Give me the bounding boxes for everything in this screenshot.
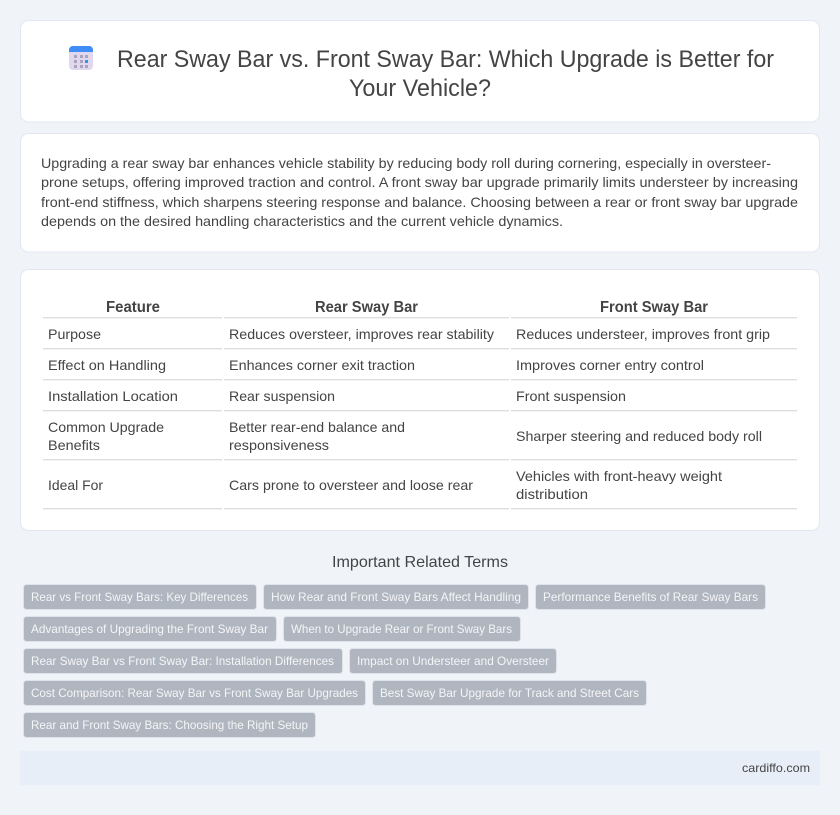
row: ideal for: Vehicles with front-heavy weight <box>516 468 722 484</box>
title: Rear Sway Bar vs. Front Sway Bar: Which Upgrade is Better for <box>117 46 774 73</box>
tag: How Rear and Front Sway Bars Affect Handling <box>271 590 521 604</box>
panel: comparison table <box>20 270 820 530</box>
tag <box>350 648 556 674</box>
tag: Performance Benefits of Rear Sway Bars <box>543 590 758 604</box>
row: effect on handling <box>48 357 704 373</box>
row: common upgrade benefits: responsiveness <box>229 437 329 453</box>
row: purpose: Reduces understeer, improves front grip <box>516 326 770 342</box>
table header row <box>106 299 708 316</box>
tag: Rear and Front Sway Bars: Choosing the Right Setup <box>31 718 308 732</box>
footer: cardiffo.com <box>742 761 810 775</box>
row: common upgrade benefits: Better rear-end balance and <box>229 419 405 435</box>
row: installation location: Installation Location <box>48 388 178 404</box>
icon: calendar <box>69 46 93 70</box>
row: purpose: Purpose <box>48 326 101 342</box>
tag: Advantages of Upgrading the Front Sway Bar <box>31 622 268 636</box>
panel: header <box>20 20 820 122</box>
row: ideal for: Ideal For <box>48 477 103 493</box>
title: Your Vehicle? <box>349 75 491 102</box>
tag <box>284 616 520 642</box>
row: ideal for: Cars prone to oversteer and loose rear <box>229 477 473 493</box>
footer <box>20 751 820 785</box>
tag: Cost Comparison: Rear Sway Bar vs Front Sway Bar Upgrades <box>31 686 358 700</box>
tag <box>264 584 528 610</box>
row: common upgrade benefits: Common Upgrade <box>48 419 164 435</box>
intro text: Upgrading a rear sway bar enhances vehicle stability by reducing body roll during cornering, especially in oversteer- <box>41 155 771 171</box>
tag <box>372 680 646 706</box>
tag: Impact on Understeer and Oversteer <box>357 654 549 668</box>
heading: important related terms: Important Related Terms <box>332 554 508 571</box>
row: purpose <box>48 326 770 342</box>
tag <box>24 584 256 610</box>
row: ideal for: distribution <box>516 486 588 502</box>
tag: Rear vs Front Sway Bars: Key Differences <box>31 590 248 604</box>
table header row: Front Sway Bar <box>600 299 708 316</box>
row: common upgrade benefits: Sharper steering and reduced body roll <box>516 428 762 444</box>
row: effect on handling: Improves corner entry control <box>516 357 704 373</box>
row: installation location <box>48 388 626 404</box>
row: installation location: Rear suspension <box>229 388 335 404</box>
tag <box>536 584 766 610</box>
row: installation location: Front suspension <box>516 388 626 404</box>
table header row: Rear Sway Bar <box>315 299 418 316</box>
panel: introduction <box>20 134 820 252</box>
row: effect on handling: Effect on Handling <box>48 357 166 373</box>
title <box>117 46 774 102</box>
row: common upgrade benefits: Benefits <box>48 437 100 453</box>
tag list <box>24 584 766 738</box>
tag <box>24 680 366 706</box>
intro text: prone setups, offering improved traction and control. A front sway bar upgrade primarily limits understeer by increasing <box>41 174 798 190</box>
tag: Best Sway Bar Upgrade for Track and Street Cars <box>380 686 639 700</box>
row: purpose: Reduces oversteer, improves rear stability <box>229 326 494 342</box>
intro text: front-end stiffness, which sharpens steering response and balance. Choosing between a rear or front sway bar upgrade <box>41 194 798 210</box>
tag: Rear Sway Bar vs Front Sway Bar: Installation Differences <box>31 654 334 668</box>
row: effect on handling: Enhances corner exit traction <box>229 357 415 373</box>
table header row: Feature <box>106 299 160 316</box>
intro text <box>41 155 798 229</box>
row: common upgrade benefits <box>48 419 762 453</box>
tag: When to Upgrade Rear or Front Sway Bars <box>291 622 512 636</box>
intro text: depends on the desired handling characteristics and the current vehicle dynamics. <box>41 213 563 229</box>
tag <box>24 648 342 674</box>
tag <box>24 616 276 642</box>
row: ideal for <box>48 468 722 502</box>
tag <box>24 712 316 738</box>
